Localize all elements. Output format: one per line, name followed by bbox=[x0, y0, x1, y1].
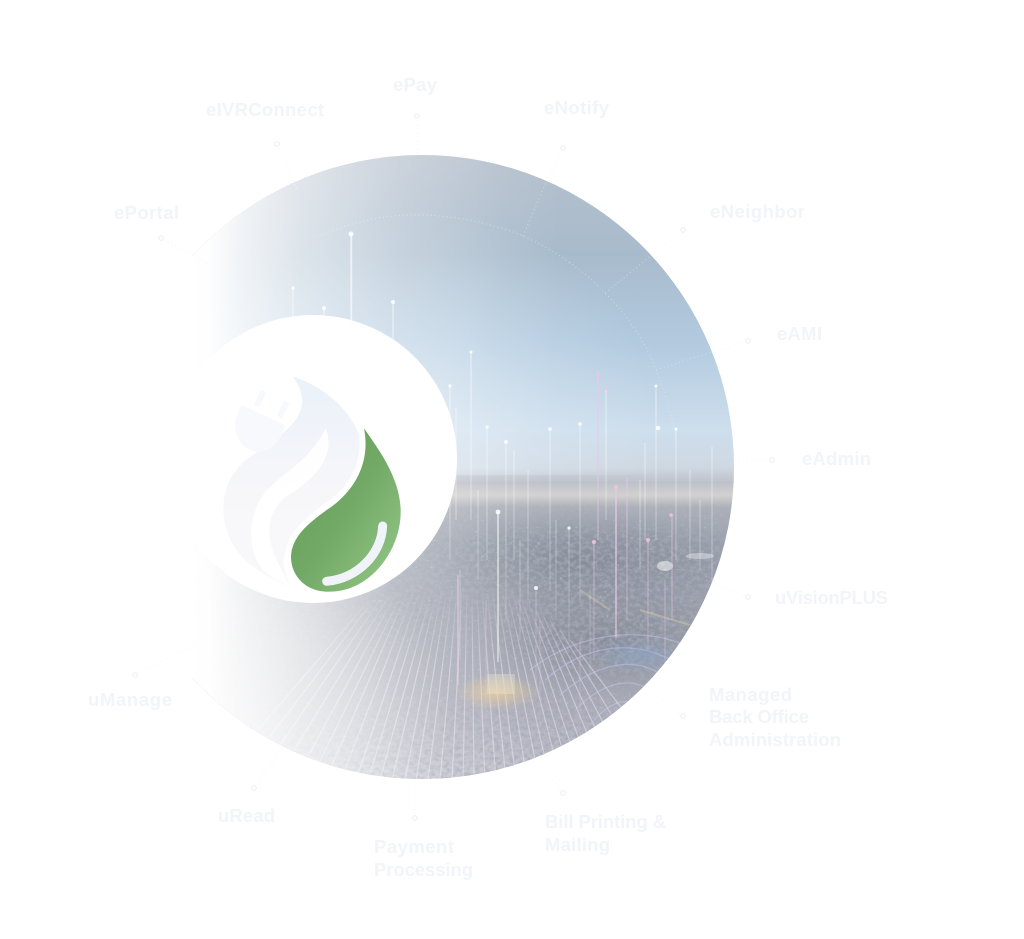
label: Managed Back Office Administration: Administration bbox=[709, 729, 841, 750]
city lights bbox=[462, 678, 532, 707]
icon: flame bbox=[223, 377, 362, 587]
white fade to the left bbox=[192, 155, 504, 779]
label: Payment Processing: Processing bbox=[374, 859, 473, 880]
icon: green drop bbox=[291, 428, 401, 592]
label: Bill Printing & Mailing: Mailing bbox=[545, 834, 610, 855]
vertical data lines bbox=[291, 232, 712, 740]
white inner circle bbox=[169, 315, 457, 603]
icon: plug bbox=[235, 390, 289, 452]
drop highlight bbox=[327, 526, 383, 581]
label: Managed Back Office Administration bbox=[709, 684, 841, 750]
wave arcs bbox=[530, 635, 695, 725]
outer dotted spoke ends bbox=[135, 116, 772, 818]
label: uManage: uManage bbox=[88, 689, 172, 710]
label: Managed Back Office Administration: Back Office bbox=[709, 706, 809, 727]
label: eAMI: eAMI bbox=[777, 323, 822, 344]
label: Managed Back Office Administration: Managed bbox=[709, 684, 792, 705]
dotted ring and spokes bbox=[318, 180, 712, 440]
label: uRead: uRead bbox=[218, 805, 275, 826]
bright sky glow bbox=[376, 284, 556, 475]
label: ePortal: ePortal bbox=[114, 202, 179, 223]
distant hills and dark city mass bbox=[488, 526, 696, 590]
label: eNotify: eNotify bbox=[544, 97, 610, 118]
label: Bill Printing & Mailing: Bill Printing & bbox=[545, 811, 666, 832]
label: ePay: ePay bbox=[393, 74, 438, 95]
product labels bbox=[88, 74, 888, 880]
label: Payment Processing: Payment bbox=[374, 836, 454, 857]
extra fade in the lower left bbox=[206, 598, 407, 778]
label: eAdmin: eAdmin bbox=[802, 448, 871, 469]
photo disc: smart city skyline bbox=[192, 150, 760, 785]
label: Payment Processing bbox=[374, 836, 473, 880]
label: uVisionPLUS: uVisionPLUS bbox=[775, 587, 888, 608]
white gap around drop bbox=[291, 428, 401, 592]
spoke node markers bbox=[133, 114, 774, 820]
label: eNeighbor: eNeighbor bbox=[710, 201, 805, 222]
label: Bill Printing & Mailing bbox=[545, 811, 666, 855]
city texture bbox=[221, 516, 729, 779]
flame swirl cut-outs bbox=[251, 428, 328, 587]
label: eIVRConnect: eIVRConnect bbox=[206, 99, 324, 120]
logo: plug, flame and leaf drop bbox=[223, 377, 401, 592]
perspective light grid bbox=[289, 602, 622, 779]
